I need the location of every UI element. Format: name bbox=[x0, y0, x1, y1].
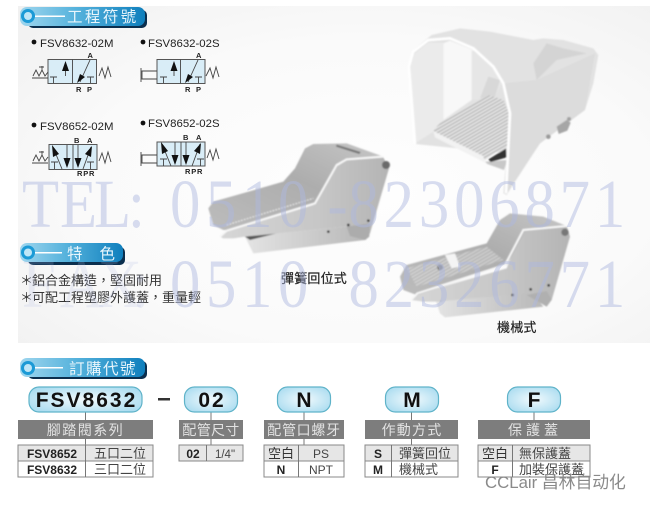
symbol: FSV8652-02M bbox=[32, 121, 113, 178]
symbol: FSV8632-02S: R bbox=[185, 85, 191, 94]
order field: cover: 無保護蓋 bbox=[519, 446, 571, 461]
watermark: fax: FAX: bbox=[22, 246, 165, 323]
watermark: telephone: TEL: 0510-82306871 bbox=[22, 166, 625, 243]
order field: pipe size: 02 bbox=[198, 389, 226, 412]
symbol: FSV8652-02M: RPR bbox=[77, 169, 95, 178]
order field: port thread bbox=[264, 387, 344, 477]
symbol: FSV8632-02S: P bbox=[196, 85, 201, 94]
symbol: FSV8632-02S bbox=[141, 38, 220, 94]
dash separator bbox=[158, 398, 170, 400]
order field: actuation: M bbox=[373, 463, 383, 477]
heading: features: 特色 bbox=[67, 245, 132, 263]
features text: 鋁合金構造，堅固耐用 bbox=[32, 273, 162, 288]
order field: cover: F bbox=[491, 463, 499, 477]
symbol: FSV8652-02S: A bbox=[196, 133, 202, 142]
symbol: FSV8652-02S: RPR bbox=[185, 167, 203, 176]
photo: foot pedal with protective cover bbox=[408, 28, 598, 195]
order field: series: FSV8652 bbox=[27, 447, 77, 461]
order field: cover: 加裝保護蓋 bbox=[519, 462, 584, 477]
order field: actuation: S bbox=[374, 447, 382, 461]
symbol: FSV8652-02S: B bbox=[183, 133, 189, 142]
order field: pipe size: 1/4" bbox=[215, 449, 235, 461]
features text: ＊ bbox=[20, 273, 33, 288]
order field: series bbox=[18, 387, 153, 477]
order field: pipe size: 02 bbox=[186, 447, 200, 461]
label: spring return: 彈簧回位式 bbox=[281, 271, 347, 286]
order field: port thread: NPT bbox=[309, 463, 334, 477]
symbol: FSV8632-02M: FSV8632-02M bbox=[40, 38, 113, 50]
order field: series: 五口二位 bbox=[94, 446, 146, 461]
order field: cover bbox=[478, 387, 590, 477]
symbol: FSV8652-02S bbox=[141, 118, 220, 176]
label: mechanical: 機械式 bbox=[497, 320, 537, 335]
order field: port thread: N bbox=[296, 389, 312, 412]
symbol: FSV8632-02M: R bbox=[76, 85, 82, 94]
symbol: FSV8632-02S: FSV8632-02S bbox=[148, 38, 220, 50]
symbol: FSV8632-02M: A bbox=[88, 51, 94, 60]
heading: order code bbox=[20, 358, 147, 379]
features text: 可配工程塑膠外護蓋，重量輕 bbox=[32, 290, 201, 305]
order field: actuation: 彈簧回位 bbox=[399, 446, 451, 461]
symbol: FSV8652-02M: FSV8652-02M bbox=[40, 121, 113, 133]
order field: series: 腳踏閥系列 bbox=[47, 422, 124, 438]
order field: series: FSV8632 bbox=[36, 389, 137, 412]
photo: mechanical pedal bbox=[400, 213, 570, 317]
background panel bbox=[18, 6, 650, 343]
watermark: fax: 0510 82326771 bbox=[170, 246, 625, 323]
order field: cover: 保護蓋 bbox=[508, 422, 562, 438]
order field: actuation: 作動方式 bbox=[382, 422, 442, 438]
symbol: FSV8632-02M: P bbox=[87, 85, 92, 94]
heading: features bbox=[20, 243, 132, 265]
watermark: brand: CCLair 昌林自动化 bbox=[485, 473, 626, 492]
photo: spring return pedal bbox=[208, 143, 390, 253]
order field: cover: F bbox=[528, 389, 541, 412]
order field: series: FSV8632 bbox=[27, 463, 77, 477]
symbol: FSV8632-02M bbox=[32, 38, 113, 94]
order field: actuation: M bbox=[403, 389, 421, 412]
order field: series: 三口二位 bbox=[94, 462, 146, 477]
symbol: FSV8632-02S: A bbox=[196, 51, 202, 60]
heading: order code: 訂購代號 bbox=[69, 360, 137, 378]
order field: cover: 空白 bbox=[482, 446, 508, 461]
heading: engineering symbols: 工程符號 bbox=[67, 8, 139, 26]
order field: actuation: 機械式 bbox=[399, 462, 438, 477]
order field: pipe size bbox=[179, 387, 243, 461]
order field: actuation bbox=[365, 387, 458, 477]
order field: pipe size: 配管尺寸 bbox=[182, 422, 240, 438]
symbol: FSV8652-02S: FSV8652-02S bbox=[148, 118, 220, 130]
features text: ＊ bbox=[20, 290, 33, 305]
order field: port thread: N bbox=[277, 463, 285, 477]
order field: port thread: PS bbox=[313, 447, 329, 461]
heading: engineering symbols bbox=[20, 7, 147, 28]
order field: port thread: 配管口螺牙 bbox=[267, 422, 341, 438]
symbol: FSV8652-02M: B bbox=[74, 136, 80, 145]
features text bbox=[20, 273, 201, 305]
symbol: FSV8652-02M: A bbox=[87, 136, 93, 145]
order field: port thread: 空白 bbox=[268, 446, 294, 461]
